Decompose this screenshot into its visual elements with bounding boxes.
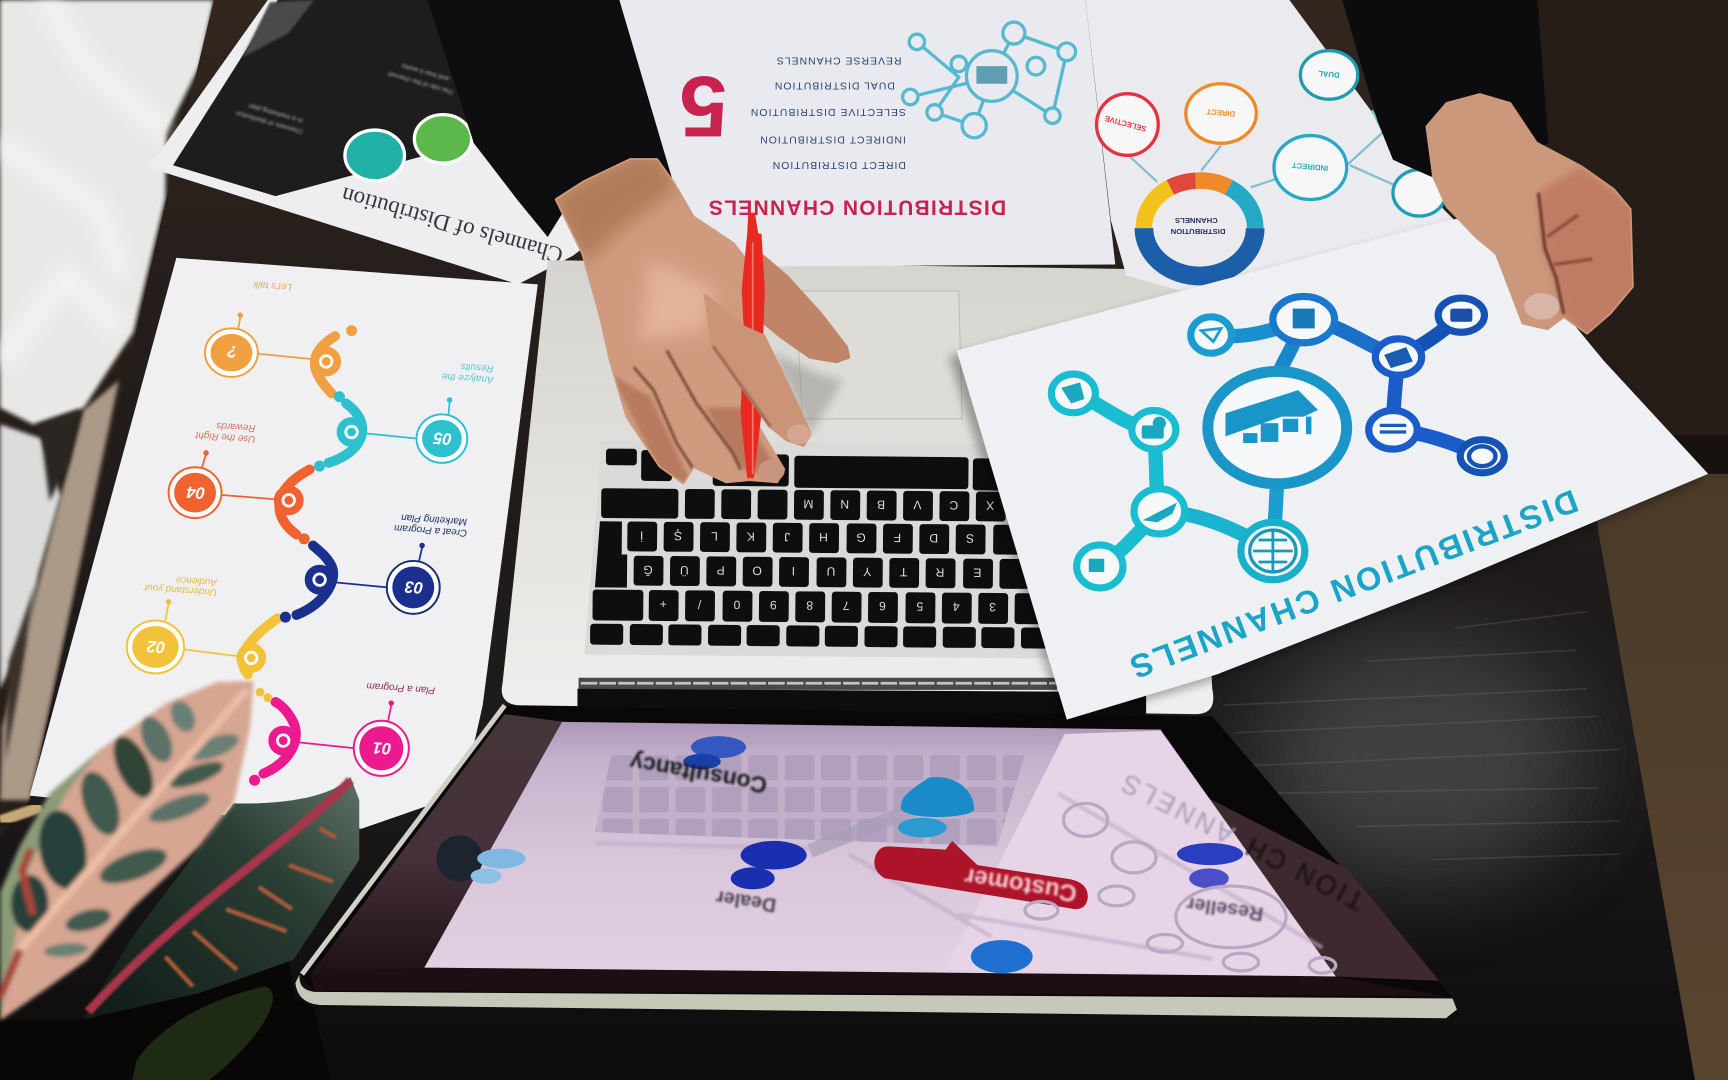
key legends: 0 [733,598,740,612]
step numbers: 01 [372,738,392,758]
key legends: V [912,498,922,512]
key legends: K [747,529,755,544]
paper heading: Channels of Distribution [338,181,566,268]
pin dots [166,312,452,706]
tablet label: consultancy: Consultancy [628,749,769,799]
sleeve: left arm [428,0,673,237]
paper: infographic timeline [30,258,538,829]
dark panel small text: Channels of distribution [235,109,304,135]
key legends: D [929,531,938,545]
step labels: Plan a Program [366,680,436,696]
back of hand with fingers [557,160,784,483]
icon: green badge [414,115,472,163]
joint centres [247,357,356,745]
channel list [750,54,906,170]
key legends: M [803,497,813,511]
index fingernail [787,424,811,444]
paper: distribution channels list [619,0,1115,267]
paper: channel ring chart: CHANNELS [1175,216,1218,225]
stem [0,807,42,821]
dark foliage base [0,961,331,1080]
step labels: Understand your [143,581,217,598]
tablet [295,705,1457,1018]
index finger crease [713,346,770,426]
paper: main distribution channels [949,215,1708,725]
icon: teal badge [345,130,404,181]
key legends: R [935,565,944,579]
back leaf [83,777,359,1019]
channel list: INDIRECT DISTRIBUTION [759,134,906,145]
key legends: I [792,564,795,578]
thumbnail [1524,293,1559,320]
key legends: P [717,563,725,577]
blue blobs [471,736,1243,973]
tablet reflected dark badge [436,835,483,882]
channel circle labels: DUAL [1318,69,1340,80]
key legends: S [966,531,974,545]
key legends: 4 [953,600,960,614]
channel circle labels: INDIRECT [1291,161,1329,173]
right hand [1427,95,1642,342]
key legends: H [819,530,828,544]
key legends: U [826,564,835,578]
laptop base [502,260,1213,725]
step labels: Use the Right [194,429,256,444]
channel list: DIRECT DISTRIBUTION [772,159,906,170]
channel circle labels [1104,69,1340,173]
key legends: T [899,565,907,579]
tablet reflected network [1025,803,1336,973]
paper: types of channels of distribution [149,0,661,284]
step labels: Let's talk [252,279,292,292]
step numbers: ? [226,342,238,361]
network links [1073,315,1482,566]
channel list: REVERSE CHANNELS [776,54,901,65]
key legends [639,495,997,614]
key legends: 7 [842,599,849,613]
key legends: J [784,530,790,544]
key legends: Ğ [643,563,653,578]
key legends: X [986,498,994,513]
tablet label: dealer: Dealer [714,886,778,916]
step labels: Analyze the [441,370,495,385]
ring chart [1144,181,1255,276]
keyboard [584,441,1067,659]
step badges [127,328,467,776]
key legends: E [973,566,982,580]
step labels: Audience [175,574,218,588]
dark panel small text [235,61,455,135]
key legends: B [877,498,885,512]
timeline dots [249,325,357,786]
sleeve: right arm [1342,0,1548,187]
ring connectors [1127,110,1400,187]
timeline joints [240,350,363,752]
step numbers [145,342,452,758]
step labels: Results [460,361,494,374]
hinge [577,678,1146,725]
tablet label: reseller: Reseller [1185,892,1265,925]
left hand [551,154,849,485]
paper heading: DISTRIBUTION CHANNELS [708,196,1006,219]
tablet rim [295,705,1457,1018]
middle finger tip [758,460,785,482]
key legends: + [660,597,667,611]
tablet reflected text on bezel: TION CH [1238,830,1369,916]
front leaf [0,681,253,1020]
key legends: 6 [879,599,886,613]
key legends: 9 [770,598,777,612]
dark panel small text: and how it works [400,61,450,82]
heading: DISTRIBUTION CHANNELS [1123,483,1583,686]
lower dark leaf [132,986,273,1080]
tablet screen reflection [424,722,1336,976]
dark panel small text: The role of the channel [387,70,455,95]
step labels: Creat a Program [394,522,467,538]
paper: channel ring chart [1086,0,1466,292]
network nodes [1051,296,1504,588]
tablet label: customer arrow: Customer [962,862,1079,907]
key legends: / [697,597,701,611]
key legends: Ü [680,563,689,577]
key legends: 3 [989,600,996,614]
channel circle labels: DIRECT [1206,107,1236,118]
trackpad [796,291,962,419]
red pen [741,213,765,478]
node icons [1061,309,1495,572]
key legends: 8 [806,598,813,612]
hand shadow on trackpad [771,353,843,435]
ring label: DISTRIBUTION [1170,227,1225,236]
step numbers: 02 [145,637,166,657]
key legends: Y [863,565,871,579]
index finger [705,295,810,445]
big number 5: 5 [680,58,727,154]
channel list: SELECTIVE DISTRIBUTION [750,106,906,117]
dark panel small text: in a marketing plan [248,102,304,124]
key legends: Ş [674,529,682,543]
key legends: O [752,564,762,578]
step numbers: 05 [432,428,452,449]
channel list: DUAL DISTRIBUTION [774,80,895,91]
tablet reflected text on screen: ANNELS [1114,766,1239,850]
step labels: Marketing Plan [400,511,467,527]
tablet label: customer arrow [874,841,1088,909]
small network diagram [903,22,1076,138]
step labels [143,279,495,696]
centre hub [1208,371,1347,484]
key legends: G [856,530,866,544]
key legends: F [894,531,901,545]
plant leaves [0,681,359,1080]
step labels: Rewards [216,420,256,433]
step numbers: 04 [186,482,206,503]
key legends: 5 [916,599,923,613]
thumb [749,253,849,361]
hand shading [551,154,782,485]
key legends: L [711,529,718,543]
key legends: C [949,498,958,512]
timeline connectors [165,317,450,748]
key legends: N [840,497,849,511]
curved timeline [243,336,362,774]
channel circle labels: SELECTIVE [1104,114,1147,134]
channel circles [1097,51,1446,216]
step numbers: 03 [404,577,424,597]
key legends: İ [640,529,643,543]
